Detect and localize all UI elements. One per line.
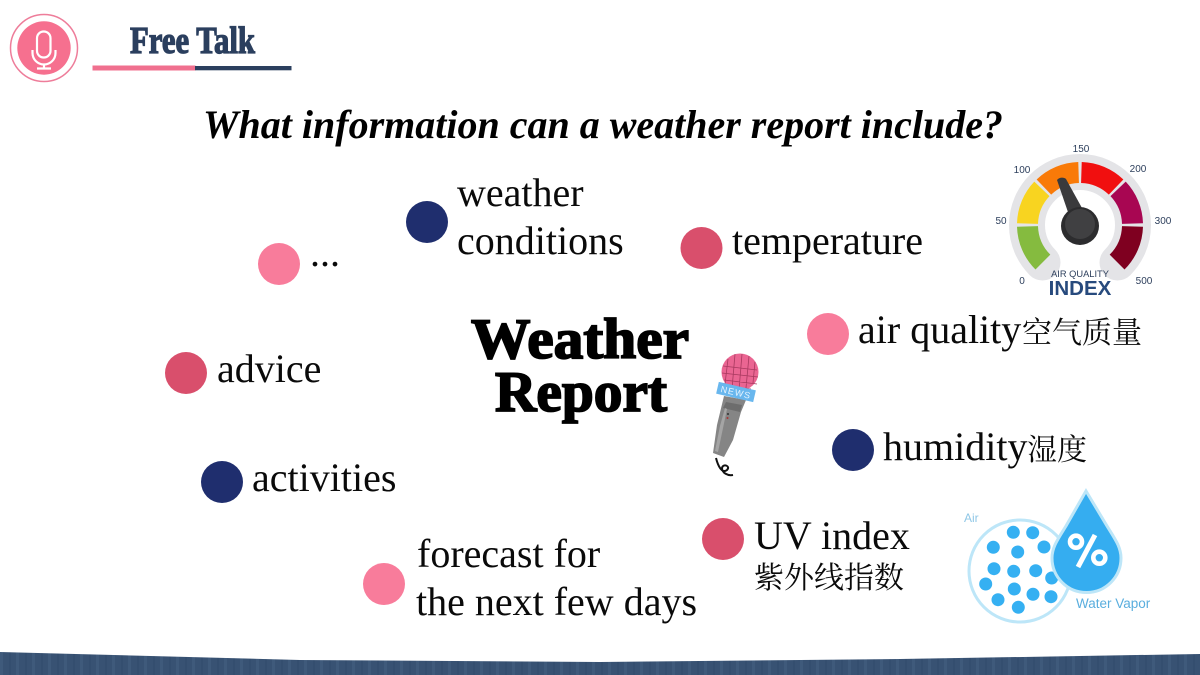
- item: humidity: humidity: [883, 424, 1027, 469]
- item: temperature: temperature: [732, 218, 923, 263]
- item: temperature: [680, 218, 923, 269]
- item: ellipsis: [258, 230, 340, 285]
- item: air quality: air quality: [858, 307, 1021, 352]
- icon: air quality index gauge: 0: [1019, 276, 1025, 287]
- item: UV index: [702, 513, 910, 595]
- center title: Weather Report: Report: [495, 361, 667, 424]
- item: air quality: [807, 307, 1142, 355]
- icon: news microphone: [713, 354, 758, 475]
- item: forecast: forecast for: [417, 531, 600, 576]
- item: UV index: 紫外线指数: [754, 562, 904, 595]
- item: weather conditions: weather: [457, 170, 584, 215]
- item: advice: advice: [217, 346, 321, 391]
- item: humidity: [832, 424, 1087, 471]
- icon: air quality index gauge: INDEX: [1049, 277, 1112, 300]
- icon: air quality index gauge: AIR QUALITY: [1051, 269, 1109, 279]
- icon: microphone badge: [10, 14, 78, 82]
- item: activities: activities: [252, 455, 396, 500]
- header: Free Talk: [10, 14, 292, 82]
- icon: air quality index gauge: 50: [995, 216, 1007, 227]
- icon: air quality index gauge: 300: [1155, 216, 1172, 227]
- heading: Free Talk: Free Talk: [130, 20, 256, 62]
- item: UV index: UV index: [754, 513, 910, 558]
- icon: air quality index gauge: 200: [1130, 164, 1147, 175]
- item: forecast: [363, 531, 697, 624]
- icon: air quality index gauge: 150: [1073, 144, 1090, 155]
- item: advice: [165, 346, 321, 394]
- item: ellipsis: ...: [310, 230, 340, 275]
- item: air quality: 空气质量: [1022, 317, 1142, 350]
- center title: Weather Report: [471, 308, 689, 424]
- item: activities: [201, 455, 396, 503]
- item: weather conditions: [406, 170, 624, 263]
- icon: air quality index gauge: 500: [1136, 276, 1153, 287]
- center title: Weather Report: Weather: [471, 308, 689, 371]
- icon: air quality index gauge: 100: [1014, 165, 1031, 176]
- item: weather conditions: conditions: [457, 218, 624, 263]
- icon: humidity air and water vapor: Water Vapor: [1076, 596, 1151, 611]
- heading underline: [92, 66, 292, 70]
- item: humidity: 湿度: [1027, 434, 1087, 467]
- icon: air quality index gauge: [995, 144, 1172, 300]
- icon: news microphone: NEWS: [720, 384, 752, 401]
- item: forecast: the next few days: [416, 579, 697, 624]
- icon: humidity air and water vapor: [964, 491, 1151, 622]
- question heading: What information can a weather report include?: [203, 102, 1003, 147]
- icon: humidity air and water vapor: Air: [964, 511, 979, 525]
- footer band: [0, 652, 1200, 675]
